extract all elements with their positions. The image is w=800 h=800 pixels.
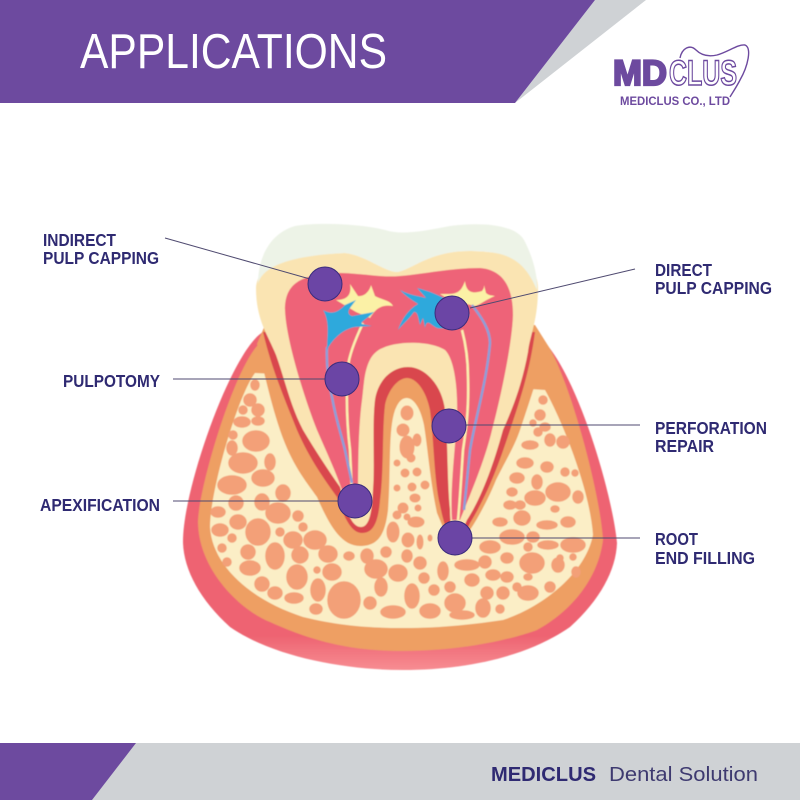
- jaw orange layer: [198, 344, 603, 651]
- bone fragments: [211, 380, 585, 619]
- logo: MEDICLUS CO., LTD: [620, 94, 730, 108]
- footer text: Dental Solution: [609, 763, 758, 786]
- header banner: [0, 0, 646, 103]
- central bone fragments: [387, 406, 432, 549]
- footer band: [0, 743, 800, 800]
- footer text: [491, 763, 758, 786]
- marker: direct pulp capping: [435, 296, 469, 330]
- label: root end filling: END FILLING: [655, 548, 755, 568]
- marker: root end filling: [438, 521, 472, 555]
- enamel: [258, 224, 537, 290]
- nerve branches cream: [336, 281, 495, 318]
- label: indirect pulp capping: INDIRECT: [43, 230, 116, 250]
- marker: apexification: [338, 484, 372, 518]
- label: direct pulp capping: [655, 260, 772, 298]
- label: perforation repair: [655, 418, 767, 456]
- label: pulpotomy: PULPOTOMY: [63, 371, 160, 391]
- marker: perforation repair: [432, 409, 466, 443]
- blood vessels blue: [323, 288, 490, 510]
- label: direct pulp capping: PULP CAPPING: [655, 278, 772, 298]
- tooth and jaw illustration: [183, 224, 617, 670]
- logo: [613, 45, 749, 108]
- tooth socket orange: [257, 325, 547, 556]
- title: APPLICATIONS: [80, 25, 387, 79]
- label: indirect pulp capping: [43, 230, 159, 268]
- logo: MD: [613, 54, 667, 93]
- label: root end filling: ROOT: [655, 529, 698, 549]
- label: perforation repair: PERFORATION: [655, 418, 767, 438]
- label: apexification: APEXIFICATION: [40, 495, 160, 515]
- label: perforation repair: REPAIR: [655, 436, 714, 456]
- label: direct pulp capping: DIRECT: [655, 260, 712, 280]
- pulp: [285, 268, 513, 520]
- marker: pulpotomy: [325, 362, 359, 396]
- nerves cream: [347, 323, 468, 520]
- gum outer: [183, 332, 617, 670]
- label: root end filling: [655, 529, 755, 568]
- logo: CLUS: [669, 54, 737, 93]
- marker: indirect pulp capping: [308, 267, 342, 301]
- periodontal dark red: [263, 332, 535, 548]
- leader lines: [165, 238, 640, 538]
- footer text: MEDICLUS: [491, 763, 596, 786]
- jaw bone: [210, 373, 593, 628]
- dentin: [256, 251, 538, 540]
- label: indirect pulp capping: PULP CAPPING: [43, 248, 159, 268]
